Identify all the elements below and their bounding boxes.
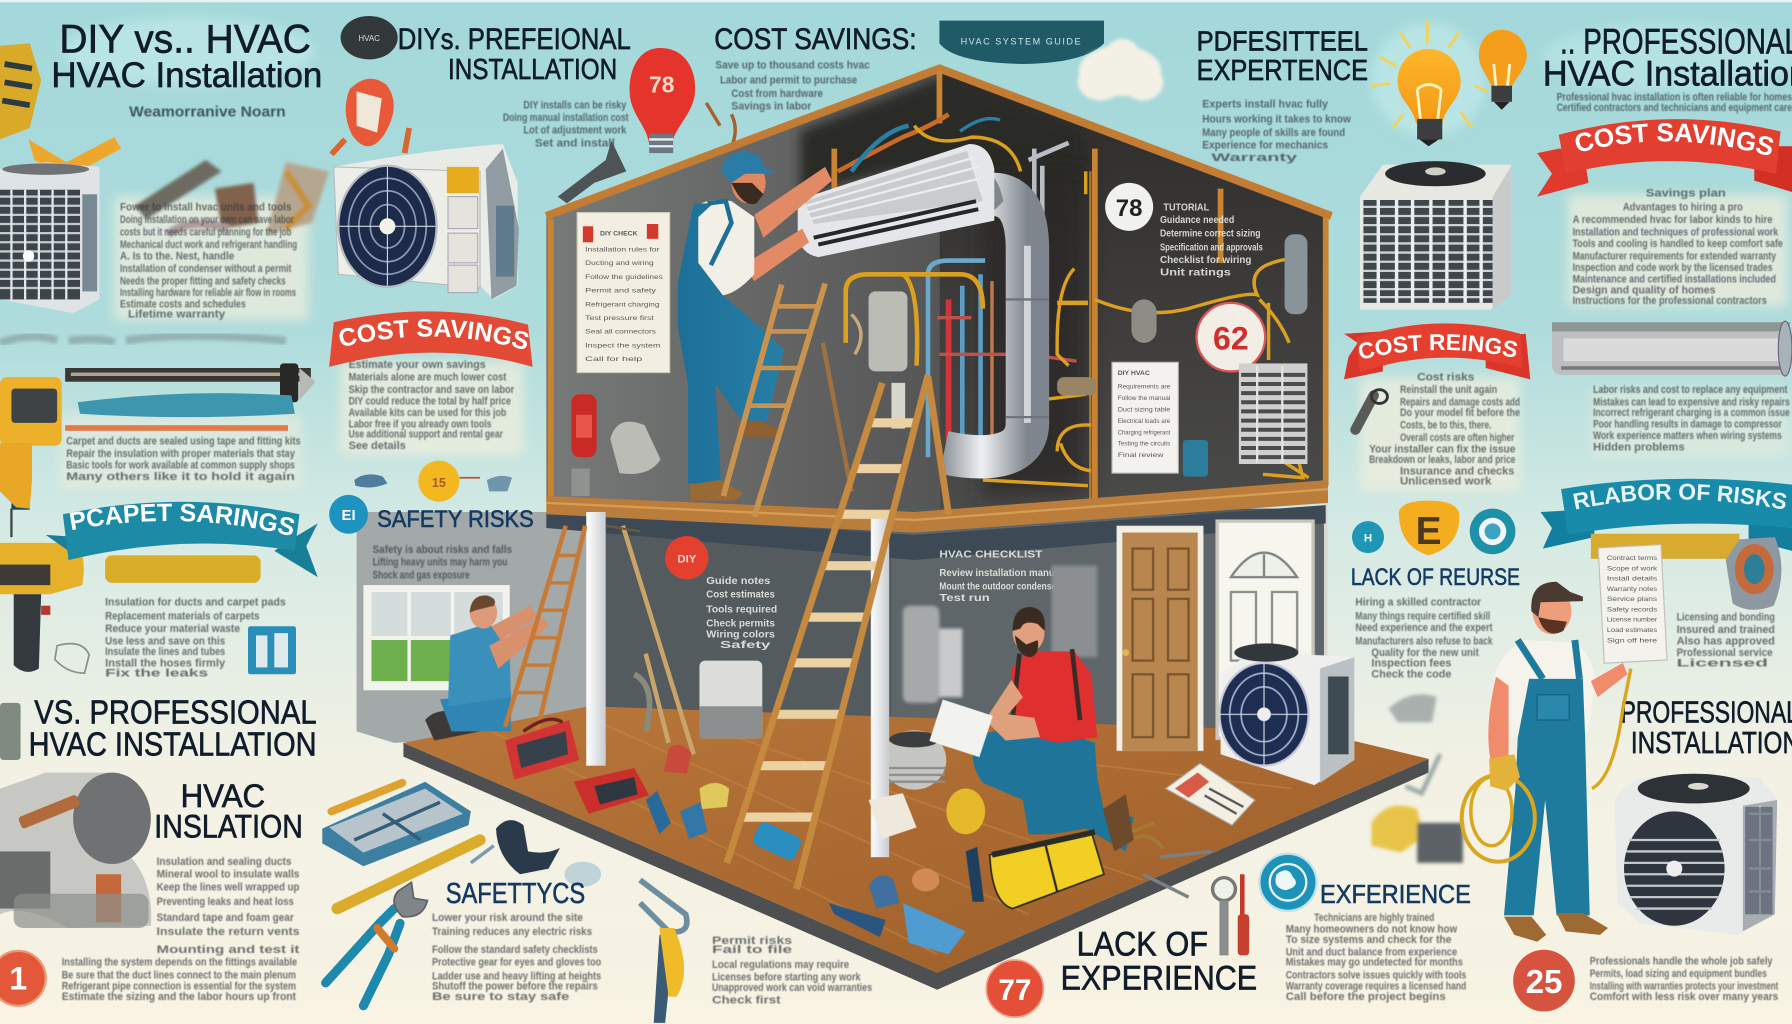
icon: AC unit with fan bbox=[334, 144, 519, 299]
text block: bottom middle: Local regulations may require bbox=[712, 959, 849, 971]
text block: safetycs: Protective gear for eyes and gloves too bbox=[432, 957, 601, 969]
badge: number 1 bbox=[0, 951, 46, 1006]
banner: cost reings: COST REINGS bbox=[1358, 334, 1518, 358]
panel: lower floor bbox=[403, 706, 1429, 990]
text block: top middle bbox=[503, 100, 629, 149]
icon: paper held by worker: Sign off here bbox=[1607, 637, 1657, 644]
heading: lack of reurse: LACK OF REURSE bbox=[1351, 564, 1520, 591]
icon: yellow roller bbox=[105, 555, 261, 583]
table: load chart bbox=[1239, 363, 1307, 464]
badge: 77: 77 bbox=[998, 974, 1031, 1007]
text block: chalkboard lower right bbox=[939, 550, 1063, 604]
text block: chalkboard lower right: Review installation manual bbox=[939, 568, 1063, 579]
icon: paper held by worker: License number bbox=[1607, 617, 1658, 624]
text block: left column 1: Fower to install hvac units and tools bbox=[120, 201, 291, 213]
icon: red fire extinguisher bbox=[571, 394, 661, 496]
text block: bottom left: Estimate the sizing and the labor hours up front bbox=[62, 991, 296, 1003]
text block: left under cost savings: Estimate your own savings bbox=[349, 359, 486, 371]
text block: bottom middle: Licenses before starting any work bbox=[712, 972, 861, 984]
icon: tools top left bbox=[135, 160, 329, 234]
icon: teal globe badge bbox=[1259, 854, 1317, 911]
text block: chalkboard lower bbox=[665, 536, 777, 651]
title: top left: HVAC Installation bbox=[51, 55, 322, 95]
text block: safety risks bbox=[373, 544, 512, 581]
icon: paint roller and rod bbox=[65, 363, 315, 431]
text block: bottom left bbox=[62, 957, 297, 1003]
icon: paper on upper wall right: Charging refrigerant bbox=[1118, 429, 1170, 436]
text block: left under roller: Carpet and ducts are sealed using tape and fitting kits bbox=[66, 436, 301, 448]
icon: small can left bbox=[0, 703, 21, 760]
text block: cost savings top center bbox=[715, 60, 870, 113]
icon: paper on upper wall right bbox=[1112, 362, 1178, 473]
icon: yellow toolbox bbox=[990, 832, 1104, 909]
text block: cost savings top center: Save up to thousand costs hvac bbox=[715, 60, 870, 72]
text block: experience: To size systems and check for the bbox=[1286, 934, 1451, 946]
heading: professional installation right bbox=[1621, 694, 1792, 760]
icon: small tool row: 15 bbox=[432, 476, 446, 490]
icon: paper held by worker: Contract terms bbox=[1607, 555, 1658, 562]
banner: labor of risks bbox=[1540, 478, 1792, 551]
icon: brown door bbox=[1117, 526, 1203, 751]
text block: left middle: Fix the leaks bbox=[105, 668, 208, 680]
text block: lack of reurse: Manufacturers also refuse to back bbox=[1355, 636, 1493, 648]
text block: chalkboard upper right bbox=[1160, 202, 1263, 278]
icon: small tool row bbox=[354, 461, 512, 502]
icon: lower floor scattered tools bbox=[646, 745, 1211, 954]
badge: 77 bbox=[986, 960, 1043, 1017]
heading: lack of experience bbox=[1061, 925, 1257, 998]
text block: experience: Mistakes may go undetected for months bbox=[1286, 957, 1463, 969]
banner: cost savings left: COST SAVINGS bbox=[339, 319, 528, 349]
panel: lower room walls bbox=[357, 503, 1326, 754]
text block: chalkboard upper right: Determine correct sizing bbox=[1160, 229, 1261, 240]
banner: cost reings bbox=[1344, 323, 1530, 380]
heading: vs professional hvac installation bbox=[29, 694, 317, 763]
text block: left middle: Use less and save on this bbox=[105, 636, 225, 648]
icon: red balloon thermostat: 78 bbox=[649, 72, 674, 98]
icon: lower left ladder bbox=[505, 526, 585, 731]
badge: 25 bbox=[1513, 950, 1575, 1011]
heading: hvac insulation: HVAC bbox=[181, 778, 265, 814]
text block: left under roller bbox=[66, 436, 301, 483]
text block: left column 1: Needs the proper fitting and safety checks bbox=[120, 276, 286, 288]
text block: insulation: Insulate the return vents bbox=[157, 926, 299, 938]
text block: chalkboard lower right: Test run bbox=[939, 593, 990, 604]
icon: yellow light bulbs bbox=[1371, 21, 1527, 146]
text block: chalkboard lower: Wiring colors bbox=[706, 630, 775, 641]
icon: wires over unit bbox=[838, 114, 1069, 217]
icon: paper held by worker: Safety records bbox=[1607, 606, 1658, 613]
icon: wall paper notice: Test pressure first bbox=[585, 315, 654, 322]
text block: bottom right bbox=[1590, 956, 1778, 1003]
text block: under silver tube bbox=[1593, 384, 1790, 453]
text block: experience bbox=[1286, 912, 1466, 1003]
text block: left under cost savings bbox=[349, 359, 515, 452]
icon: AC unit left bbox=[0, 162, 99, 313]
text block: top middle: Set and install bbox=[535, 137, 615, 149]
icon: hand tool bbox=[1355, 390, 1387, 430]
text block: bottom middle: Permit risks bbox=[712, 935, 792, 947]
text block: safetycs: Ladder use and heavy lifting at heights bbox=[432, 970, 601, 982]
banner: cost savings top right: COST SAVINGS bbox=[1576, 123, 1774, 155]
icon: paper on upper wall right: Follow the manual bbox=[1118, 395, 1171, 402]
text block: left middle: Replacement materials of carpets bbox=[105, 610, 259, 622]
icon: paper held by worker bbox=[1598, 545, 1667, 663]
text block: under silver tube: Hidden problems bbox=[1593, 441, 1685, 453]
text block: left column 1: Lifetime warranty bbox=[128, 309, 226, 321]
icon: paper on upper wall right: Duct sizing table bbox=[1118, 406, 1170, 413]
text block: bottom left: Be sure that the duct lines connect to the main plenum bbox=[62, 969, 296, 981]
icon: red balloon thermostat bbox=[630, 48, 695, 153]
heading: lack of experience: LACK OF bbox=[1077, 925, 1208, 963]
icon: paper held by worker: Scope of work bbox=[1607, 565, 1658, 572]
text block: lack of reurse: Many things require certified skill bbox=[1355, 610, 1490, 622]
panel: upper floor slab bbox=[546, 480, 1328, 560]
text block: left under cost savings: Labor free if you already own tools bbox=[349, 418, 491, 430]
text block: left under roller: Basic tools for work available at common supply shops bbox=[66, 460, 295, 472]
heading: safety risks: SAFETY RISKS bbox=[377, 506, 534, 533]
text block: chalkboard upper right: TUTORIAL bbox=[1163, 202, 1209, 213]
heading: vs professional hvac installation: VS. PROFESSIONAL bbox=[34, 694, 317, 731]
icon: wall paper notice: Inspect the system bbox=[585, 342, 661, 349]
icon: lower stepladder bbox=[606, 526, 694, 754]
text block: chalkboard lower right: Mount the outdoor condenser bbox=[939, 582, 1059, 593]
icon: paper on upper wall right: Testing the circuits bbox=[1118, 441, 1171, 448]
text block: safetycs: Follow the standard safety checklists bbox=[432, 944, 598, 956]
icon: bottom right AC unit bbox=[1615, 774, 1777, 935]
icon: pliers wrench bbox=[326, 882, 427, 1006]
icon: wall AC unit bbox=[798, 144, 994, 257]
icon: safety risks circle bbox=[329, 495, 368, 534]
heading: safetycs: SAFETTYCS bbox=[446, 878, 585, 910]
icon: grey machine bbox=[0, 773, 151, 928]
icon: yellow tool top left bbox=[0, 43, 121, 177]
text block: lack of reurse bbox=[1355, 597, 1493, 681]
icon: smudged row left bbox=[0, 336, 286, 343]
icon: teal name plate bbox=[939, 21, 1104, 64]
icon: wall paper notice: Refrigerant charging bbox=[585, 301, 660, 308]
text block: insulation: Insulation and sealing ducts bbox=[157, 856, 291, 868]
heading: professional experience: PDFESITTEEL bbox=[1197, 25, 1368, 56]
icon: back wall machines bbox=[903, 566, 1097, 703]
text block: bottom middle: Fail to file bbox=[712, 944, 792, 956]
text block: experience: Call before the project begins bbox=[1286, 991, 1446, 1003]
text block: safetycs: Shutoff the power before the repairs bbox=[432, 981, 598, 993]
text block: under cost savings right: Design and quality of homes bbox=[1573, 285, 1715, 297]
text block: safetycs: Be sure to stay safe bbox=[432, 991, 569, 1003]
text block: lack of reurse: Need experience and the expert bbox=[1355, 622, 1493, 634]
text block: left under cost savings: DIY could reduce the total by half price bbox=[349, 396, 511, 408]
badge: 25: 25 bbox=[1526, 964, 1562, 1001]
icon: grey portable unit bbox=[699, 661, 762, 738]
text block: under cost reings: Insurance and checks bbox=[1400, 465, 1514, 477]
subtitle: left: Weamorranive Noarn bbox=[129, 105, 286, 121]
icon: yellow drill bbox=[0, 377, 62, 537]
text block: bottom middle: Unapproved work can void warranties bbox=[712, 982, 872, 994]
text block: under cost reings: Breakdown or leaks, labor and price bbox=[1369, 454, 1515, 466]
text block: top right bbox=[1557, 92, 1792, 114]
text block: under cost reings: Repairs and damage costs add bbox=[1400, 397, 1520, 409]
icon: wall paper notice: Ducting and wiring bbox=[585, 260, 654, 267]
text block: worker right: Also has approved bbox=[1677, 636, 1775, 648]
heading: cost savings: COST SAVINGS: bbox=[714, 23, 917, 56]
text block: under cost reings bbox=[1369, 372, 1520, 488]
icon: cloud bbox=[1078, 39, 1163, 101]
icon: paper held by worker: Load estimates bbox=[1607, 627, 1658, 634]
text block: left middle: Reduce your material waste bbox=[105, 623, 240, 635]
icon: paper held by worker: Warranty notes bbox=[1607, 586, 1658, 593]
icon: yellow roller right bbox=[1591, 534, 1781, 610]
text block: left column 1: costs but it needs careful planning for the job bbox=[120, 226, 291, 238]
text block: left under roller: Many others like it to hold it again bbox=[66, 471, 295, 483]
icon: small safety tool bbox=[471, 820, 687, 932]
text block: cost savings top center: Savings in labor bbox=[731, 101, 812, 113]
text block: left column 1: A. Is to the. Nest, handle bbox=[120, 250, 234, 262]
icon: dark badge: HVAC bbox=[358, 34, 380, 43]
text block: bottom left: Installing the system depends on the fittings available bbox=[62, 957, 297, 969]
text block: safety risks: Safety is about risks and falls bbox=[373, 544, 512, 556]
text block: safety risks: Shock and gas exposure bbox=[373, 569, 470, 581]
text block: experience: Unit and duct balance from experience bbox=[1286, 946, 1457, 958]
text block: left middle: Insulate the lines and tubes bbox=[105, 646, 225, 658]
text block: chalkboard upper right: Unit ratings bbox=[1160, 267, 1231, 278]
icon: duct pipe bbox=[944, 166, 1049, 457]
icon: big ladder bbox=[727, 375, 949, 889]
icon: wrench top center bbox=[558, 103, 735, 203]
title: top right bbox=[1543, 22, 1792, 94]
heading: DIY vs professional installation: INSTALLATION bbox=[448, 54, 617, 86]
banner: carpet savings: PCAPET SARINGS bbox=[70, 504, 294, 536]
icon: teal circles row bbox=[1352, 501, 1515, 555]
icon: magnifier and screwdriver bbox=[1213, 874, 1249, 955]
text block: experience: Experts install hvac fully bbox=[1202, 98, 1329, 110]
badge: number 1: 1 bbox=[9, 961, 27, 997]
icon: white door bbox=[1217, 521, 1313, 738]
icon: silver tube bbox=[1552, 321, 1792, 376]
text block: under cost savings right: Savings plan bbox=[1646, 188, 1726, 200]
text block: insulation bbox=[157, 856, 300, 956]
text block: experience: Warranty coverage requires a licensed hand bbox=[1286, 981, 1466, 993]
icon: gauge 62 bbox=[1197, 303, 1265, 371]
text block: left under cost savings: See details bbox=[349, 440, 406, 452]
icon: professional worker with coil bbox=[1462, 582, 1631, 942]
icon: red tool bag 2 bbox=[574, 768, 649, 814]
icon: thermostat 78 bbox=[1105, 183, 1153, 231]
text block: under cost reings: Reinstall the unit again bbox=[1400, 384, 1497, 396]
text block: chalkboard lower: Guide notes bbox=[706, 576, 771, 587]
panel: house upper room bbox=[546, 69, 1331, 514]
icon: yellow nail gun bbox=[0, 543, 84, 672]
text block: top middle: Doing manual installation cost bbox=[503, 112, 629, 124]
text block: chalkboard lower: Check permits bbox=[706, 618, 775, 629]
text block: lack of reurse: Hiring a skilled contractor bbox=[1355, 597, 1482, 609]
text block: experience: Many homeowners do not know how bbox=[1286, 924, 1457, 936]
text block: cost savings top center: Cost from hardware bbox=[731, 88, 823, 100]
text block: bottom left: Refrigerant pipe connection is essential for the system bbox=[62, 981, 296, 993]
icon: paper on upper wall right: DIY HVAC bbox=[1118, 370, 1150, 377]
title: top left bbox=[51, 18, 322, 95]
heading: professional experience bbox=[1197, 25, 1368, 87]
text block: safetycs: Lower your risk around the site bbox=[432, 912, 583, 924]
heading: experience small: EXFERIENCE bbox=[1320, 879, 1471, 909]
heading: hvac insulation bbox=[154, 778, 303, 845]
icon: teal name plate: HVAC SYSTEM GUIDE bbox=[961, 37, 1081, 47]
text block: bottom middle: Check first bbox=[712, 994, 781, 1006]
text block: under cost reings: Do your model fit before the bbox=[1400, 407, 1520, 419]
banner: carpet savings bbox=[46, 502, 318, 577]
icon: red gauge bbox=[331, 79, 409, 154]
icon: blue tool box bbox=[322, 782, 471, 866]
text block: top middle: Lot of adjustment work bbox=[523, 125, 627, 137]
icon: lower AC small bbox=[882, 730, 946, 790]
icon: thermostat 78: 78 bbox=[1116, 195, 1142, 222]
icon: lower AC unit bbox=[1219, 643, 1354, 785]
title: top left: DIY vs.. HVAC bbox=[59, 18, 311, 62]
icon: yellow screwdriver bbox=[654, 928, 684, 1023]
icon: worker on ladder top bbox=[678, 152, 832, 501]
text block: chalkboard lower right: HVAC CHECKLIST bbox=[939, 550, 1043, 561]
heading: vs professional hvac installation: HVAC INSTALLATION bbox=[29, 726, 317, 763]
text block: chalkboard upper right: Guidance needed bbox=[1160, 215, 1234, 226]
icon: blue box bbox=[55, 626, 296, 674]
icon: white columns bbox=[586, 512, 606, 766]
text block: lack of reurse: Inspection fees bbox=[1371, 657, 1451, 669]
icon: gauge 62: 62 bbox=[1213, 321, 1249, 357]
banner: cost savings top right bbox=[1537, 119, 1792, 197]
text block: insulation: Mineral wool to insulate walls bbox=[157, 869, 299, 881]
icon: paper held by worker: Install details bbox=[1607, 576, 1658, 583]
text block: left under cost savings: Materials alone are much lower cost bbox=[349, 372, 506, 384]
heading: hvac insulation: INSLATION bbox=[154, 809, 303, 845]
icon: wall paper notice: DIY CHECK bbox=[600, 230, 638, 237]
text block: chalkboard lower: Safety bbox=[720, 640, 771, 651]
icon: paper on upper wall right: Final review bbox=[1118, 452, 1163, 459]
text block: left under cost savings: Skip the contractor and save on labor bbox=[349, 384, 515, 396]
text block: worker right: Insured and trained bbox=[1677, 624, 1775, 636]
text block: left column 1: Mechanical duct work and refrigerant handling bbox=[120, 239, 297, 251]
text block: cost savings top center: Labor and permit to purchase bbox=[720, 74, 857, 86]
text block: chalkboard lower: DIY bbox=[677, 553, 697, 565]
text block: left middle: Insulation for ducts and carpet pads bbox=[105, 597, 286, 609]
icon: teal circles row: E bbox=[1416, 510, 1442, 553]
icon: teal circles row: H bbox=[1364, 533, 1372, 545]
icon: red tool bag 1 bbox=[505, 719, 579, 779]
text block: lack of reurse: Check the code bbox=[1371, 669, 1451, 681]
text block: worker right: Licensed bbox=[1677, 657, 1768, 669]
text block: chalkboard upper right: Checklist for wiring bbox=[1160, 255, 1251, 266]
text block: chalkboard lower: Tools required bbox=[706, 605, 777, 616]
icon: red shirt worker bbox=[929, 607, 1134, 851]
text block: safety risks: Lifting heavy units may harm you bbox=[373, 557, 507, 569]
text block: under cost reings: Unlicensed work bbox=[1400, 476, 1492, 488]
text block: safetycs: Training reduces any electric risks bbox=[432, 926, 592, 938]
text block: experience: Contractors solve issues quickly with tools bbox=[1286, 969, 1466, 981]
text panel backdrops bbox=[59, 17, 1792, 491]
text block: insulation: Keep the lines well wrapped up bbox=[157, 881, 299, 893]
icon: AC unit right bbox=[1360, 161, 1511, 310]
icon: paper held by worker: Service plans bbox=[1607, 596, 1658, 603]
icon: safety risks circle: EI bbox=[342, 508, 356, 524]
text block: experience: Hours working it takes to know bbox=[1202, 113, 1351, 125]
text block: chalkboard upper right: Specification and approvals bbox=[1160, 242, 1263, 253]
icon: wall paper notice: Installation rules for bbox=[585, 246, 660, 253]
text block: experience: Technicians are highly trained bbox=[1314, 912, 1434, 924]
text block: left column 1 bbox=[120, 201, 297, 321]
icon: wall paper notice: Seal all connectors bbox=[585, 329, 657, 336]
heading: DIY vs professional installation: DIYs. PREFEIONAL bbox=[398, 23, 631, 56]
icon: paper on upper wall right: Requirements are bbox=[1118, 384, 1170, 391]
text block: left under cost savings: Use additional support and rental gear bbox=[349, 429, 503, 441]
icon: right floor gear bbox=[1371, 694, 1463, 863]
text block: under cost reings: Overall costs are often higher bbox=[1400, 432, 1515, 444]
text block: experience: Many people of skills are found bbox=[1202, 127, 1345, 139]
text block: under cost reings: Your installer can fix the issue bbox=[1369, 444, 1515, 456]
icon: upper ladder bbox=[723, 283, 851, 517]
text block: left under roller: Repair the insulation with proper materials that stay bbox=[66, 448, 295, 460]
icon: dark badge bbox=[341, 16, 398, 59]
heading: lack of experience: EXPERIENCE bbox=[1061, 960, 1257, 998]
icon: wall paper notice: Follow the guidelines bbox=[585, 274, 664, 281]
text block: left column 1: Estimate costs and schedules bbox=[120, 298, 246, 310]
text block: insulation: Standard tape and foam gear bbox=[157, 912, 294, 924]
icon: open book bbox=[1166, 763, 1255, 825]
icon: yellow tape bars bbox=[331, 783, 480, 909]
text block: experience: Experience for mechanics bbox=[1202, 140, 1328, 152]
text block: bottom middle bbox=[712, 935, 872, 1006]
heading: DIY vs professional installation bbox=[398, 23, 631, 86]
icon: lower worker sitting bbox=[425, 595, 549, 741]
text block: left under cost savings: Available kits can be used for this job bbox=[349, 407, 506, 419]
text block: experience: Warranty bbox=[1211, 152, 1298, 164]
text block: left column 1: Doing installation on your own can save labor bbox=[120, 214, 294, 226]
text block: left column 1: Installation of condenser without a permit bbox=[120, 263, 292, 275]
text block: chalkboard lower: Cost estimates bbox=[706, 590, 775, 601]
icon: wall paper notice: Call for help bbox=[585, 356, 643, 363]
icon: window bbox=[363, 585, 510, 690]
text block: under cost reings: Cost risks bbox=[1417, 372, 1474, 384]
text block: under cost savings right bbox=[1573, 188, 1783, 307]
text block: left column 1: Installing hardware for reliable air flow in rooms bbox=[120, 287, 296, 299]
icon: small wall gauges bbox=[869, 234, 1307, 477]
banner: labor of risks: RLABOR OF RISKS bbox=[1573, 484, 1786, 510]
icon: wall paper notice bbox=[577, 213, 670, 373]
text block: under cost savings right: Advantages to hiring a pro bbox=[1623, 201, 1743, 213]
text block: left middle: Install the hoses firmly bbox=[105, 657, 226, 669]
text block: worker right bbox=[1677, 612, 1775, 669]
text block: insulation: Preventing leaks and heat loss bbox=[157, 896, 294, 908]
text block: top middle: DIY installs can be risky bbox=[523, 100, 627, 112]
text block: insulation: Mounting and test it bbox=[157, 944, 300, 956]
text block: safetycs bbox=[432, 912, 601, 1003]
text block: left middle bbox=[105, 597, 286, 680]
text block: lack of reurse: Quality for the new unit bbox=[1371, 647, 1479, 659]
text block: worker right: Professional service bbox=[1677, 647, 1773, 659]
text block: experience bbox=[1202, 98, 1351, 164]
chart-like: red and blue pipes bbox=[846, 171, 1309, 486]
icon: paper on upper wall right: Electrical loads are bbox=[1118, 418, 1170, 425]
text block: under cost reings: Costs, be to this, there. bbox=[1400, 420, 1491, 432]
icon: wall paper notice: Permit and safety bbox=[585, 288, 657, 295]
heading: professional experience: EXPERTENCE bbox=[1197, 55, 1368, 87]
